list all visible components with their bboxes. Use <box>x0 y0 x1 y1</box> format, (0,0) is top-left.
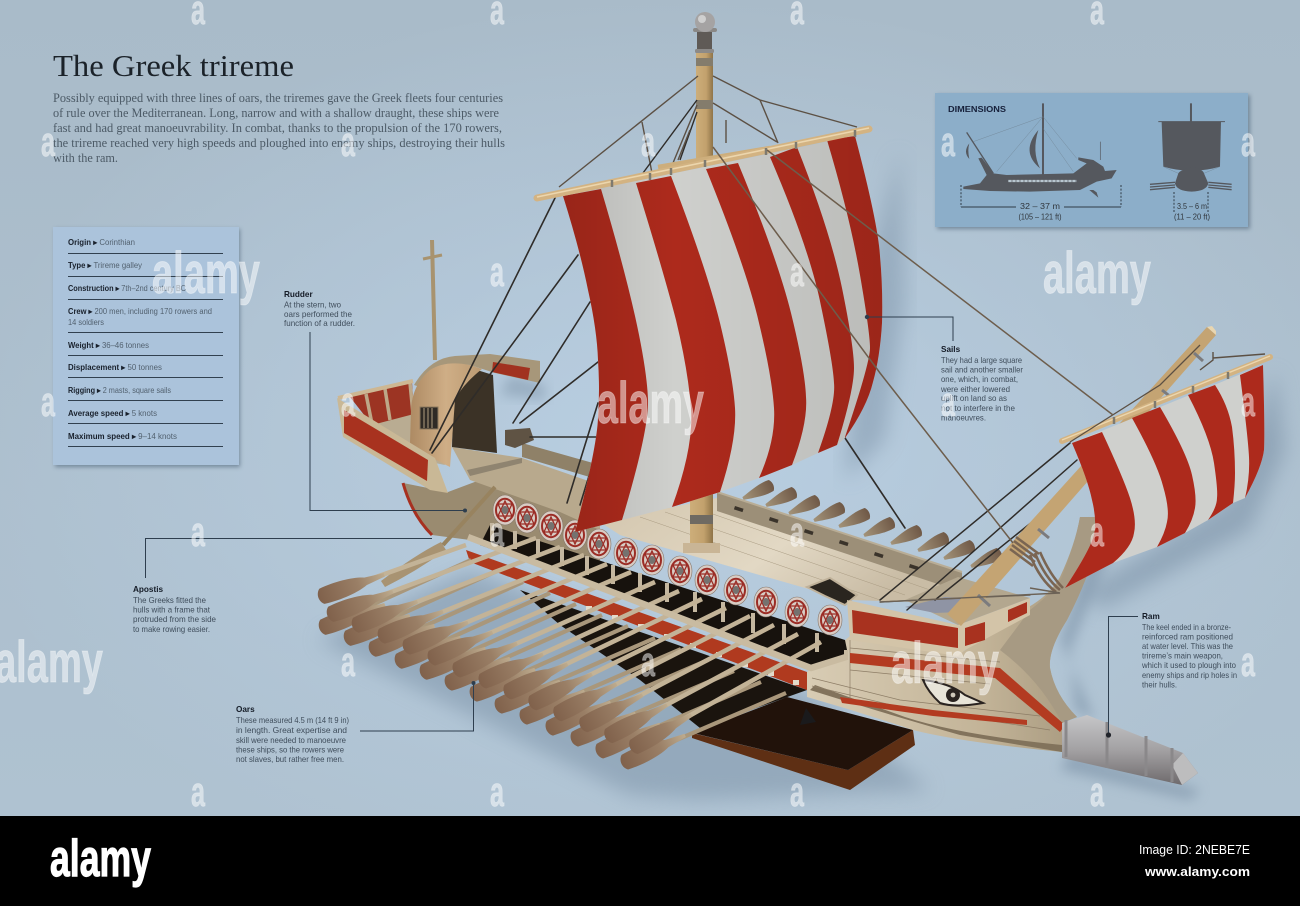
apostis beam <box>468 537 846 668</box>
watermarks: a <box>1241 378 1255 425</box>
watermarks: a <box>1090 508 1104 555</box>
panel: dimensions: 3.5 – 6 m <box>1177 202 1207 211</box>
poop side wall <box>337 398 448 493</box>
callout: ram: their hulls. <box>1142 680 1177 690</box>
watermarks: a <box>790 248 804 295</box>
title: The Greek trireme <box>53 48 294 83</box>
watermarks: a <box>490 508 504 555</box>
callout: rudder: oars performed the <box>284 310 352 319</box>
callout: sails <box>865 315 1023 422</box>
red hull bands <box>850 653 1065 732</box>
callout: apostis: to make rowing easier. <box>133 625 210 634</box>
callout: sails: Sails <box>941 345 961 354</box>
watermarks: a <box>790 768 804 815</box>
callout: rudder: function of a rudder. <box>284 319 355 328</box>
callout: ram: The keel ended in a bronze- <box>1142 623 1231 632</box>
callout: rudder <box>284 290 467 512</box>
watermarks: a <box>1241 118 1255 165</box>
panel: specifications: 14 soldiers <box>68 318 104 327</box>
callout: sails: They had a large square <box>941 356 1022 365</box>
sail white cloth <box>563 136 882 532</box>
panel: dimensions: (11 – 20 ft) <box>1174 212 1210 222</box>
small yard <box>1062 357 1270 441</box>
watermarks: alamy <box>1043 241 1151 306</box>
callout: apostis: The Greeks fitted the <box>133 596 206 605</box>
watermarks: a <box>490 248 504 295</box>
steering gear <box>505 428 534 448</box>
forestays <box>713 147 1113 543</box>
watermarks: a <box>941 378 955 425</box>
callout: ram <box>1106 612 1237 738</box>
upper tier shafts <box>320 538 821 748</box>
watermarks: a <box>41 378 55 425</box>
panel: specifications: Crew ▸ 200 men, including 170 rowers and <box>68 307 212 316</box>
shields <box>493 495 842 635</box>
intro text: fast and had great manoeuvrability. In combat, thanks to the propulsion of the 170 rowers, <box>53 121 502 135</box>
watermarks: a <box>1090 768 1104 815</box>
shield posts <box>492 523 817 652</box>
watermarks: a <box>341 118 355 165</box>
red stripes <box>563 136 882 532</box>
callout: oars: Oars <box>236 705 255 714</box>
callout: sails: one, which, in combat, <box>941 375 1018 384</box>
footer bar: alamy <box>50 830 151 888</box>
callout: oars: these ships, so the rowers were <box>236 746 344 754</box>
panel: dimensions <box>935 93 1250 229</box>
panel: specifications: Maximum speed ▸ 9–14 knots <box>68 432 177 441</box>
callout: rudder: Rudder <box>284 290 313 299</box>
callout: apostis: Apostis <box>133 585 163 594</box>
footer bar: Image ID: 2NEBE7E <box>1139 842 1250 857</box>
rigging behind sails <box>430 198 1093 610</box>
callout: sails: uplift on land so as <box>941 394 1007 403</box>
callout: oars: skill were needed to manoeuvre <box>236 736 346 745</box>
panel: specifications: Displacement ▸ 50 tonnes <box>68 363 162 372</box>
panel: specifications: Average speed ▸ 5 knots <box>68 409 157 418</box>
cabin interior <box>452 370 497 453</box>
icon: painted eye <box>923 680 983 706</box>
callout: ram: trireme’s main weapon, <box>1142 652 1223 660</box>
callout: sails: sail and another smaller <box>941 366 1023 374</box>
front view silhouette <box>1150 103 1232 192</box>
bow box <box>847 577 1030 656</box>
footer bar: www.alamy.com <box>1144 864 1250 879</box>
watermarks: alamy <box>152 241 260 306</box>
main deck <box>452 443 962 605</box>
watermarks: a <box>191 768 205 815</box>
watermarks: alamy <box>597 371 704 436</box>
callout: rudder: At the stern, two <box>284 300 341 310</box>
bronze ram <box>1062 715 1198 785</box>
stern post with cross <box>432 240 435 360</box>
watermarks: a <box>641 118 655 165</box>
panel: specifications: Type ▸ Trireme galley <box>68 261 142 270</box>
callout: ram: at water level. This was the <box>1142 642 1233 651</box>
watermarks: alamy <box>891 631 999 696</box>
outrigger interior <box>466 523 848 728</box>
lower tier blades <box>316 596 689 772</box>
main sail <box>537 128 882 532</box>
callout: oars <box>236 681 476 764</box>
callout: oars: not slaves, but rather free men. <box>236 755 344 764</box>
side view silhouette <box>963 103 1117 198</box>
canopy band <box>414 354 540 387</box>
display stand <box>692 697 915 790</box>
intro text: with the ram. <box>53 151 118 165</box>
intro text: of rule over the Mediterranean. Long, narrow and with a shallow draught, these ships were <box>53 106 499 120</box>
panel: specifications: Rigging ▸ 2 masts, square sails <box>68 386 171 395</box>
main mast base <box>683 490 720 553</box>
hull bow and stem <box>807 517 1097 752</box>
callout: oars: in length. Great expertise and <box>236 726 347 735</box>
panel: specifications: Origin ▸ Corinthian <box>68 238 135 247</box>
callout: ram: enemy ships and rip holes in <box>1142 671 1237 680</box>
callout: oars: These measured 4.5 m (14 ft 9 in) <box>236 716 349 725</box>
panel: specifications <box>53 227 240 467</box>
panel: dimensions: DIMENSIONS <box>948 104 1006 114</box>
poop deck <box>372 413 445 465</box>
barred window <box>420 407 438 429</box>
intro text <box>53 91 505 165</box>
callout: ram: Ram <box>1142 612 1160 621</box>
far-side oars <box>740 479 1004 572</box>
callout: sails: not to interfere in the <box>941 404 1015 413</box>
watermarks: a <box>41 118 55 165</box>
callout: apostis <box>133 538 432 634</box>
watermarks: a <box>341 378 355 425</box>
watermarks: a <box>191 508 205 555</box>
callout: sails: were either lowered <box>940 385 1010 394</box>
far balustrade <box>717 492 962 592</box>
callout: ram: which it used to plough into <box>1141 661 1236 670</box>
intro text: Possibly equipped with three lines of oars, the triremes gave the Greek fleets four centuries <box>53 91 503 105</box>
rudder oar <box>381 487 495 587</box>
watermarks: a <box>941 118 955 165</box>
oars <box>315 537 846 772</box>
stern cabin and poop <box>337 240 540 587</box>
panel: dimensions: 32 – 37 m <box>1020 202 1060 211</box>
watermarks: a <box>1241 638 1255 685</box>
ship illustration <box>315 12 1285 800</box>
mast head rigging <box>559 76 857 187</box>
watermarks: a <box>341 638 355 685</box>
watermarks: a <box>490 768 504 815</box>
cabin arch <box>410 363 482 467</box>
deck hatch <box>807 578 857 605</box>
watermarks: a <box>641 638 655 685</box>
lower tier shafts <box>321 560 786 763</box>
callout: sails: manoeuvres. <box>941 414 986 422</box>
panel: dimensions: (105 – 121 ft) <box>1018 212 1062 222</box>
callout: ram: reinforced ram positioned <box>1142 632 1233 642</box>
cast shadows <box>318 150 1285 800</box>
callout: apostis: protruded from the side <box>133 615 216 624</box>
red band with oar ports <box>466 550 807 690</box>
panel: specifications: Weight ▸ 36–46 tonnes <box>68 341 149 350</box>
footer bar <box>0 816 1300 906</box>
callout: apostis: hulls with a frame that <box>133 606 211 614</box>
main mast head <box>693 12 717 160</box>
fore mast <box>880 326 1265 626</box>
yards <box>658 148 770 167</box>
rope lashing <box>1010 537 1039 566</box>
watermarks: a <box>790 508 804 555</box>
small fore sail <box>1062 345 1270 588</box>
upper tier blades <box>315 567 696 757</box>
panel: specifications: Construction ▸ 7th–2nd century BC <box>68 284 186 293</box>
intro text: the trireme reached very high speeds and ploughed into enemy ships, destroying their hulls <box>53 136 505 150</box>
stern hull <box>403 480 600 580</box>
length measure <box>961 185 1208 213</box>
